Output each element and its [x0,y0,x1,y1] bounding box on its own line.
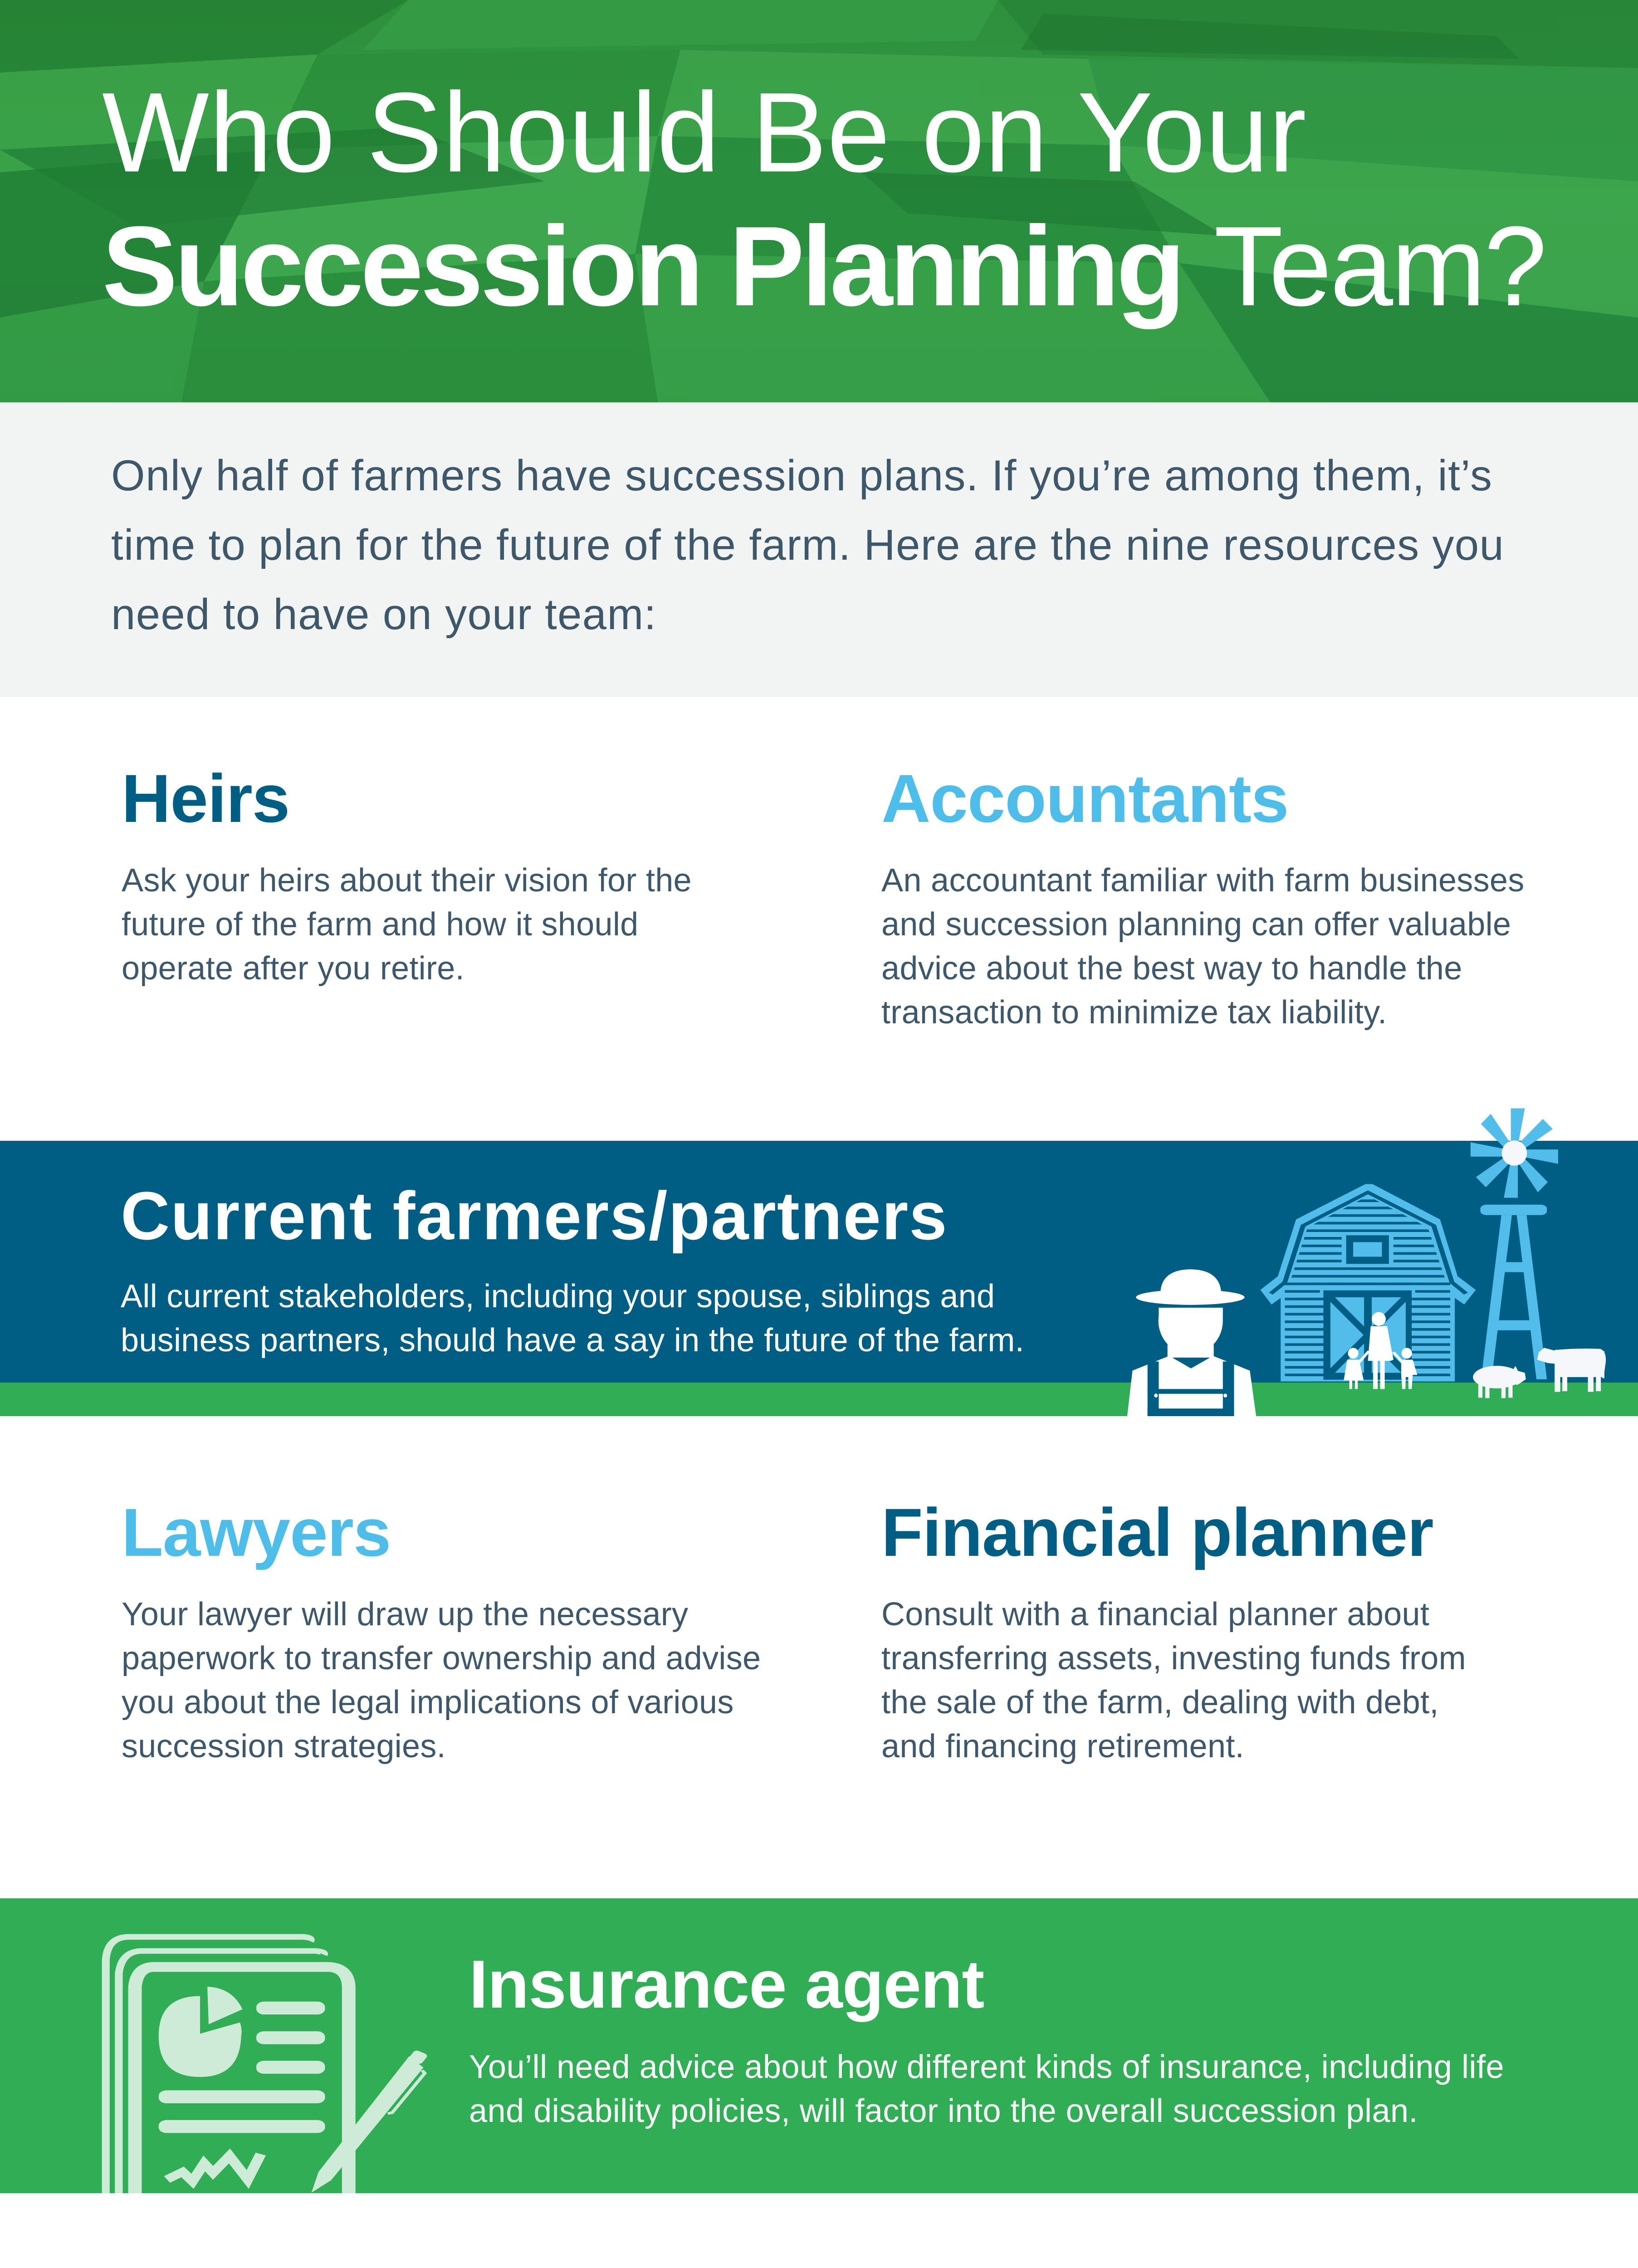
panel: insurance agent band [0,1898,1638,2193]
text: insurance agent: and disability policies, will factor into the overall succession plan. [469,2093,1418,2129]
title: Who Should Be on Your [102,69,1306,196]
heading: accountants: Accountants [881,760,1288,836]
text: financial planner: and financing retirement. [881,1728,1244,1765]
panel: current farmers band [0,1141,1638,1416]
windmill [1471,1108,1558,1379]
text: heirs [122,859,692,991]
pig [1473,1366,1526,1398]
farmer [1127,1269,1256,1416]
title: Succession Planning Team? [102,203,1545,329]
panel: accountants [881,764,1584,1064]
text: lawyers: paperwork to transfer ownership and advise [122,1640,761,1677]
text: heirs: Ask your heirs about their vision for the [122,862,692,899]
text: financial planner: the sale of the farm, dealing with debt, [881,1684,1439,1721]
text: lawyers [122,1593,761,1769]
header: green farm field background [0,0,1638,402]
text: lawyers: Your lawyer will draw up the necessary [122,1596,688,1633]
text: lawyers: you about the legal implications of various [122,1684,734,1721]
text: heirs: operate after you retire. [122,950,465,987]
text: current farmers: All current stakeholders, including your spouse, siblings and [121,1278,995,1315]
text: financial planner [881,1593,1466,1769]
text: heirs: future of the farm and how it should [122,906,638,943]
intro text: time to plan for the future of the farm. Here are the nine resources you [111,521,1504,569]
cow [1537,1348,1606,1392]
family [1344,1312,1417,1389]
text: current farmers: business partners, should have a say in the future of the farm. [121,1322,1024,1359]
text: accountants: and succession planning can offer valuable [881,906,1511,943]
heading: lawyers: Lawyers [122,1494,391,1570]
text: accountants [881,859,1525,1035]
panel: lawyers [122,1498,825,1798]
intro text [111,441,1504,649]
heading: heirs: Heirs [122,760,289,836]
text: financial planner: transferring assets, investing funds from [881,1640,1466,1677]
heading: insurance agent: Insurance agent [469,1946,984,2022]
text: insurance agent [469,2045,1504,2133]
title [102,65,1545,333]
text: accountants: advice about the best way to handle the [881,950,1462,987]
illustration: farmer, barn, windmill, family and animals [1127,1108,1606,1416]
text: insurance agent: You’ll need advice about how different kinds of insurance, including life [469,2049,1504,2085]
panel: heirs [122,764,757,1018]
text: lawyers: succession strategies. [122,1728,446,1765]
text: financial planner: Consult with a financial planner about [881,1596,1429,1633]
intro band [0,402,1638,697]
text: accountants: transaction to minimize tax liability. [881,994,1387,1031]
text: accountants: An accountant familiar with farm businesses [881,862,1525,899]
panel: financial planner [881,1498,1584,1798]
heading: current farmers/partners: Current farmers/partners [121,1178,948,1254]
intro text: need to have on your team: [111,590,657,639]
heading: financial planner: Financial planner [881,1494,1433,1570]
icon: document with pie chart and pen [68,1898,476,2193]
barn [1260,1184,1476,1381]
text: current farmers [121,1275,1024,1363]
intro text: Only half of farmers have succession plans. If you’re among them, it’s [111,451,1492,500]
